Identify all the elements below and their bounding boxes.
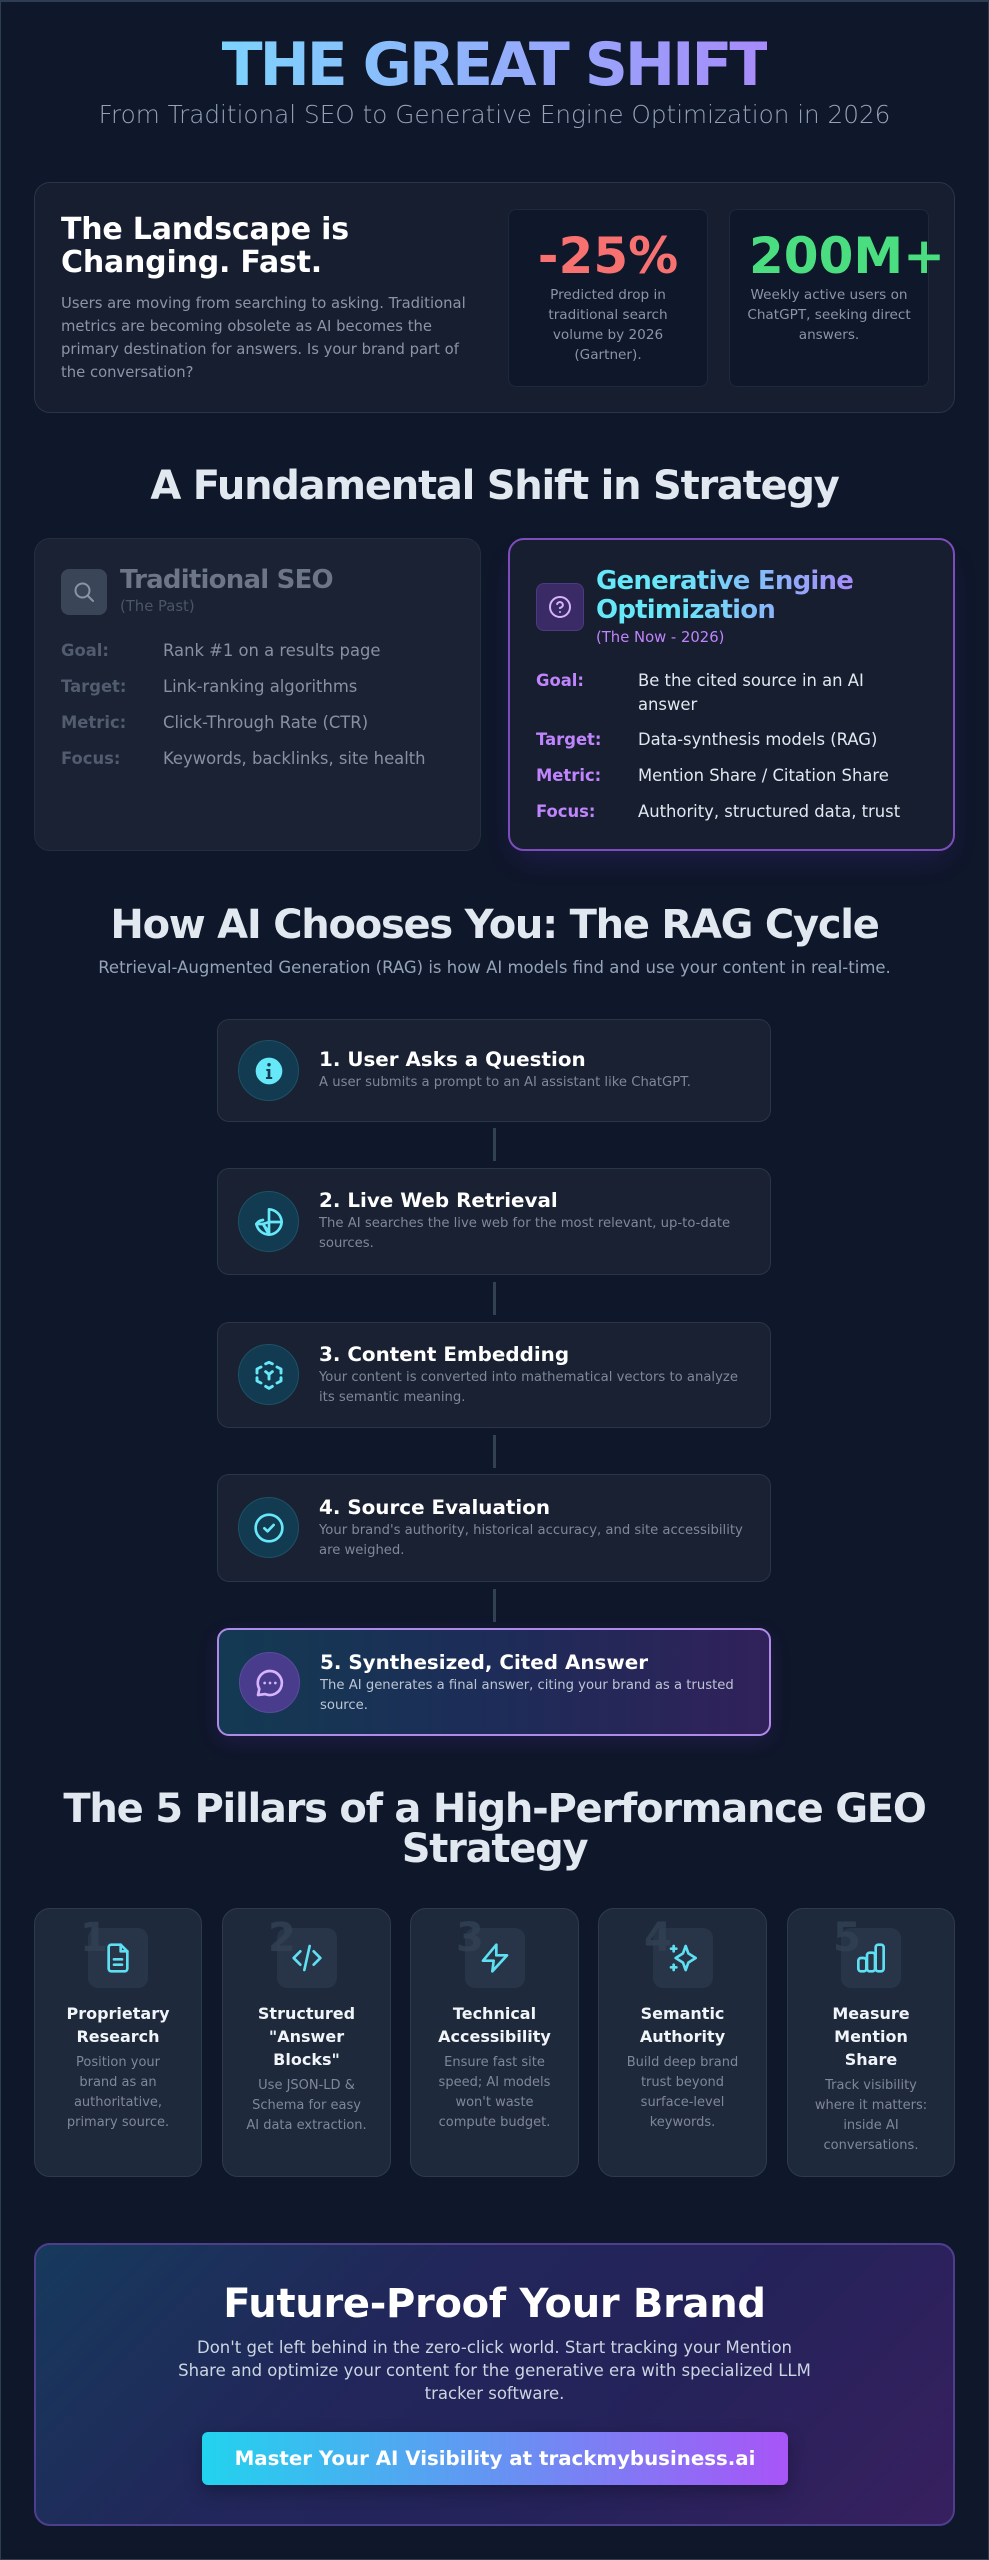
stat description: (Gartner).: [574, 347, 642, 363]
pillar 5 text: Track visibility: [825, 2078, 917, 2093]
pillar 1 title: [66, 2004, 170, 2046]
CTA button: [202, 2432, 788, 2485]
landscape text: [61, 295, 466, 381]
subtitle: From Traditional SEO to Generative Engine Optimization in 2026: [99, 100, 890, 129]
pillar 3 title: Accessibility: [438, 2027, 551, 2046]
pillar 4 text: Build deep brand: [627, 2055, 738, 2070]
generative rows: Authority, structured data, trust: [638, 802, 900, 821]
pillar 4 text: surface-level: [641, 2095, 724, 2110]
icon: embedding: [238, 1344, 299, 1405]
title: THE GREAT SHIFT: [222, 30, 767, 100]
generative rows: Be the cited source in an AI: [638, 671, 864, 690]
landscape text: metrics are becoming obsolete as AI becomes the: [61, 318, 432, 335]
panel: generative engine optimization: [508, 538, 955, 851]
heading: five pillars: The 5 Pillars of a High-Performance GEO: [63, 1786, 926, 1832]
pillar 1 title: Proprietary: [66, 2004, 170, 2023]
pillar 2 text: Use JSON-LD &: [258, 2078, 355, 2093]
number 3: 3: [456, 1915, 484, 1961]
pillar 2 title: Blocks": [273, 2050, 340, 2069]
step 4 text: Your brand's authority, historical accuracy, and site accessibility: [319, 1523, 743, 1538]
traditional subtitle: (The Past): [120, 598, 195, 615]
pillar 5 text: conversations.: [824, 2138, 918, 2153]
step 5 text: source.: [320, 1698, 368, 1713]
pillar 2 title: "Answer: [269, 2027, 344, 2046]
CTA text: [178, 2338, 811, 2403]
traditional title: Traditional SEO: [120, 565, 333, 595]
pillar 4: [598, 1908, 767, 2177]
pillar 3 text: won't waste: [455, 2095, 534, 2110]
generative title: Generative Engine: [596, 566, 853, 596]
pillar 2 text: AI data extraction.: [246, 2118, 367, 2133]
traditional rows: Goal:: [61, 641, 109, 660]
icon: sparkles: [653, 1928, 713, 1988]
heading: fundamental shift: A Fundamental Shift in Strategy: [150, 463, 839, 509]
number 1: 1: [80, 1915, 108, 1961]
connector: [493, 1128, 496, 1161]
step 2: [217, 1168, 771, 1275]
pillar 2 text: Schema for easy: [252, 2098, 361, 2113]
pillar 4 title: Authority: [640, 2027, 725, 2046]
generative rows: Focus:: [536, 802, 596, 821]
pillar 3: [410, 1908, 579, 2177]
traditional rows: Focus:: [61, 749, 120, 768]
pillar 5 text: where it matters:: [815, 2098, 927, 2113]
pillar 5 text: [815, 2078, 927, 2153]
pillar 3 text: compute budget.: [439, 2115, 550, 2130]
generative title: [596, 566, 853, 625]
pillar 2 title: [258, 2004, 355, 2069]
icon: document: [88, 1928, 148, 1988]
CTA heading: Future-Proof Your Brand: [223, 2281, 766, 2327]
icon: pie: [238, 1191, 299, 1252]
step 4 text: [319, 1523, 743, 1558]
icon: search: [61, 569, 107, 615]
step 4: [217, 1474, 771, 1582]
stat description: answers.: [799, 327, 859, 343]
step 5 text: The AI generates a final answer, citing your brand as a trusted: [320, 1678, 734, 1693]
step 3 title: 3. Content Embedding: [319, 1343, 569, 1366]
traditional rows: Link-ranking algorithms: [163, 677, 357, 696]
stat: minus 25 percent: [508, 209, 708, 387]
pillar 2: [222, 1908, 391, 2177]
generative title: Optimization: [596, 595, 775, 625]
step 5 title: 5. Synthesized, Cited Answer: [320, 1651, 648, 1674]
step 2 title: 2. Live Web Retrieval: [319, 1189, 558, 1212]
pillar 5 text: inside AI: [843, 2118, 899, 2133]
connector: [493, 1589, 496, 1622]
landscape text: Users are moving from searching to asking. Traditional: [61, 295, 466, 312]
stat description: [548, 287, 668, 363]
step 2 text: [318, 1216, 730, 1251]
icon: chat: [239, 1652, 300, 1713]
heading: five pillars: Strategy: [402, 1826, 587, 1872]
step 4 text: are weighed.: [319, 1543, 404, 1558]
pillar 5: [787, 1908, 955, 2177]
connector: [493, 1435, 496, 1468]
icon: bolt: [465, 1928, 525, 1988]
icon: bars: [841, 1928, 901, 1988]
pillar 5 title: Measure: [832, 2004, 910, 2023]
heading: five pillars: [63, 1786, 926, 1872]
pillar 1: [34, 1908, 202, 2177]
step 2 text: sources.: [319, 1236, 374, 1251]
step 3 text: its semantic meaning.: [319, 1390, 465, 1405]
generative rows: Data-synthesis models (RAG): [638, 730, 877, 749]
RAG subtitle: Retrieval-Augmented Generation (RAG) is how AI models find and use your content in real-time.: [98, 958, 891, 977]
pillar 1 text: Position your: [76, 2055, 160, 2070]
stat value: -25%: [538, 227, 678, 285]
generative rows: Mention Share / Citation Share: [638, 766, 889, 785]
step 3 text: [319, 1370, 738, 1405]
step 3: [217, 1322, 771, 1428]
traditional rows: [61, 641, 426, 768]
pillar 2 title: Structured: [258, 2004, 355, 2023]
number 4: 4: [644, 1915, 672, 1961]
pillar 3 title: Technical: [453, 2004, 536, 2023]
stat description: [747, 287, 911, 343]
step 3 text: Your content is converted into mathematical vectors to analyze: [319, 1370, 738, 1385]
pillar 1 text: primary source.: [67, 2115, 169, 2130]
heading: RAG cycle: How AI Chooses You: The RAG Cycle: [110, 902, 879, 948]
generative rows: Goal:: [536, 671, 584, 690]
step 5: [217, 1628, 771, 1736]
pillar 1 text: brand as an: [79, 2075, 157, 2090]
panel: call to action: [34, 2243, 955, 2526]
stat value: 200M+: [749, 227, 945, 285]
pillar 4 text: trust beyond: [641, 2075, 724, 2090]
step 1: [217, 1019, 771, 1122]
generative rows: answer: [638, 695, 697, 714]
stat description: traditional search: [548, 307, 668, 323]
CTA text: Don't get left behind in the zero-click world. Start tracking your Mention: [197, 2338, 792, 2357]
number 2: 2: [268, 1915, 296, 1961]
generative rows: Metric:: [536, 766, 601, 785]
stat description: Predicted drop in: [550, 287, 666, 303]
number 5: 5: [833, 1915, 861, 1961]
traditional rows: Target:: [61, 677, 126, 696]
pillar 3 text: [439, 2055, 550, 2130]
step 4 title: 4. Source Evaluation: [319, 1496, 550, 1519]
landscape heading: The Landscape is: [61, 212, 349, 247]
pillar 4 text: keywords.: [650, 2115, 715, 2130]
step 5 text: [320, 1678, 734, 1713]
landscape heading: Changing. Fast.: [61, 245, 322, 280]
generative rows: Target:: [536, 730, 601, 749]
step 1 text: A user submits a prompt to an AI assistant like ChatGPT.: [319, 1075, 691, 1090]
CTA text: tracker software.: [425, 2384, 564, 2403]
icon: info: [238, 1040, 299, 1101]
landscape heading: [61, 212, 349, 280]
panel: traditional SEO: [34, 538, 481, 851]
pillar 1 text: authoritative,: [74, 2095, 162, 2110]
pillar 4 text: [627, 2055, 738, 2130]
pillar 5 title: Share: [845, 2050, 897, 2069]
connector: [493, 1282, 496, 1315]
traditional rows: Click-Through Rate (CTR): [163, 713, 368, 732]
pillar 3 text: speed; AI models: [439, 2075, 550, 2090]
icon: question: [536, 583, 584, 631]
CTA text: Share and optimize your content for the generative era with specialized LLM: [178, 2361, 811, 2380]
stat: 200M+: [729, 209, 929, 387]
stat description: ChatGPT, seeking direct: [747, 307, 911, 323]
pillar 1 text: [67, 2055, 169, 2130]
traditional rows: Metric:: [61, 713, 126, 732]
pillar 4 title: Semantic: [641, 2004, 724, 2023]
generative rows: [536, 671, 900, 821]
pillar 5 title: Mention: [834, 2027, 908, 2046]
CTA button: Master Your AI Visibility at trackmybusiness.ai: [235, 2447, 755, 2470]
icon: check circle: [238, 1497, 299, 1558]
traditional rows: Keywords, backlinks, site health: [163, 749, 426, 768]
panel: landscape: [34, 182, 955, 413]
landscape text: the conversation?: [61, 364, 193, 381]
step 1 title: 1. User Asks a Question: [319, 1048, 586, 1071]
pillar 1 title: Research: [76, 2027, 160, 2046]
icon: code: [277, 1928, 337, 1988]
generative subtitle: (The Now - 2026): [596, 629, 724, 646]
step 2 text: The AI searches the live web for the most relevant, up-to-date: [319, 1216, 730, 1231]
stat description: volume by 2026: [553, 327, 663, 343]
pillar 3 text: Ensure fast site: [444, 2055, 545, 2070]
pillar 2 text: [246, 2078, 367, 2133]
pillar 4 title: [640, 2004, 725, 2046]
pillar 5 title: [832, 2004, 910, 2069]
landscape text: primary destination for answers. Is your brand part of: [61, 341, 459, 358]
pillar 3 title: [438, 2004, 551, 2046]
stat description: Weekly active users on: [750, 287, 908, 303]
traditional rows: Rank #1 on a results page: [163, 641, 380, 660]
